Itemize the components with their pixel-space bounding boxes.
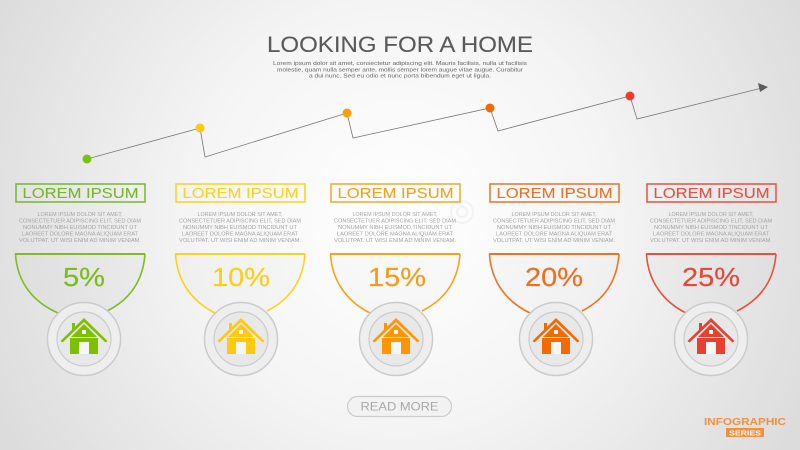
bowl [330, 254, 460, 313]
percent: 15% [368, 262, 426, 292]
description: CONSECTETUER ADIPISCING ELIT, SED DIAM [19, 218, 141, 224]
description: NONUMMY NIBH EUISMOD TINCIDUNT UT [338, 225, 453, 231]
dot 5 [626, 92, 634, 100]
infographic series badge: INFOGRAPHIC [704, 416, 786, 428]
label box: LOREM IPSUM [496, 186, 612, 202]
description: VOLUTPAT. UT WISI ENIM AD MINIM VENIAM. [179, 238, 301, 244]
label box: LOREM IPSUM [22, 186, 138, 202]
description: NONUMMY NIBH EUISMOD TINCIDUNT UT [183, 225, 298, 231]
title: LOOKING FOR A HOME [267, 32, 533, 57]
description: LOREM IPSUM DOLOR SIT AMET, [352, 212, 438, 218]
rising arrow line [82, 83, 768, 164]
description: VOLUTPAT. UT WISI ENIM AD MINIM VENIAM. [19, 238, 141, 244]
read more button [348, 396, 452, 416]
description: VOLUTPAT. UT WISI ENIM AD MINIM VENIAM. [493, 238, 615, 244]
description: LOREM IPSUM DOLOR SIT AMET, [668, 212, 754, 218]
description: NONUMMY NIBH EUISMOD TINCIDUNT UT [497, 225, 612, 231]
intro text [273, 61, 527, 80]
dot 1 [82, 154, 92, 164]
description: CONSECTETUER ADIPISCING ELIT, SED DIAM [650, 218, 772, 224]
panel: 10% [175, 184, 305, 376]
description: VOLUTPAT. UT WISI ENIM AD MINIM VENIAM. [334, 238, 456, 244]
description [19, 212, 141, 244]
dot 3 [342, 108, 352, 118]
icon: house in rings [204, 302, 278, 376]
description: LOREM IPSUM DOLOR SIT AMET, [38, 212, 123, 218]
description: CONSECTETUER ADIPISCING ELIT, SED DIAM [334, 218, 456, 224]
icon: house in rings [360, 302, 432, 376]
description [179, 212, 301, 244]
infographic series badge: SERIES [729, 428, 761, 438]
icon: house in rings [520, 302, 592, 376]
dot 2 [196, 124, 204, 132]
percent: 10% [212, 262, 270, 292]
description: LOREM IPSUM DOLOR SIT AMET, [198, 212, 283, 218]
label box [490, 184, 619, 202]
bowl [175, 254, 305, 313]
icon: house in rings [48, 302, 120, 376]
description: CONSECTETUER ADIPISCING ELIT, SED DIAM [493, 218, 615, 224]
icon: house in rings [674, 302, 748, 376]
intro text: Lorem ipsum dolor sit amet, consectetur adipiscing elit. Mauris facilisis, nulla ut facilisis [273, 61, 527, 67]
label box [331, 184, 460, 202]
description: LAOREET DOLORE MAGNA ALIQUAM ERAT [22, 232, 139, 238]
description: LOREM IPSUM DOLOR SIT AMET, [512, 212, 597, 218]
label box: LOREM IPSUM [182, 186, 298, 202]
label box [647, 184, 776, 202]
percent: 25% [682, 262, 740, 292]
panel: 15% [330, 184, 460, 376]
dot 4 [486, 104, 494, 112]
percent: 5% [63, 262, 105, 292]
panel: 25% [646, 184, 776, 376]
description [334, 212, 456, 244]
description: LAOREET DOLORE MAGNA ALIQUAM ERAT [496, 232, 613, 238]
description [493, 212, 615, 244]
bowl [646, 254, 776, 313]
infographic series badge [704, 416, 786, 438]
read more button: READ MORE [360, 400, 438, 414]
label box: LOREM IPSUM [654, 186, 770, 202]
bowl [489, 254, 619, 313]
panel: 5% [15, 184, 145, 376]
bowl [15, 254, 145, 313]
intro text: molestie, quam nulla semper ante, mollis semper lorem augue vitae augue. Curabitur [277, 67, 523, 73]
description: LAOREET DOLORE MAGNA ALIQUAM ERAT [182, 232, 299, 238]
label box: LOREM IPSUM [338, 186, 454, 202]
percent: 20% [525, 262, 583, 292]
label box [16, 184, 145, 202]
description: NONUMMY NIBH EUISMOD TINCIDUNT UT [654, 225, 769, 231]
description: NONUMMY NIBH EUISMOD TINCIDUNT UT [23, 225, 138, 231]
description: CONSECTETUER ADIPISCING ELIT, SED DIAM [179, 218, 301, 224]
description: LAOREET DOLORE MAGNA ALIQUAM ERAT [337, 232, 454, 238]
description: VOLUTPAT. UT WISI ENIM AD MINIM VENIAM. [650, 238, 772, 244]
label box [176, 184, 305, 202]
panel: 20% [489, 184, 619, 376]
description [650, 212, 772, 244]
description: LAOREET DOLORE MAGNA ALIQUAM ERAT [653, 232, 770, 238]
intro text: a dui nunc. Sed eu odio et nunc porta bibendum eget ut ligula. [309, 74, 492, 80]
arrowhead [758, 83, 768, 92]
